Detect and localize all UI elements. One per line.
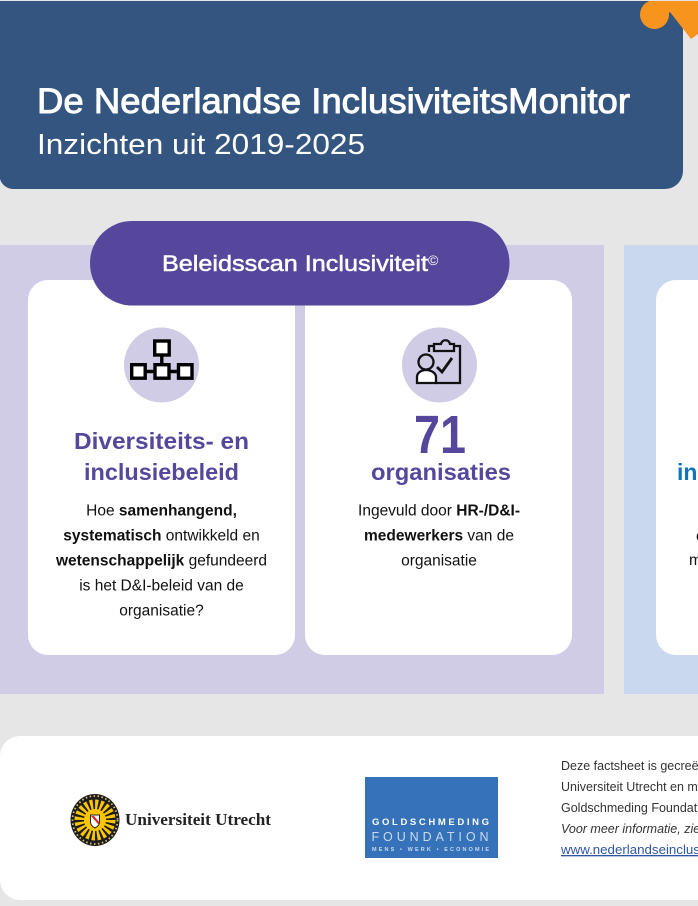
logo: Universiteit Utrecht [70, 794, 271, 846]
logo: Goldschmeding Foundation [365, 777, 498, 858]
heading fragment: blue card: in [677, 459, 697, 485]
logo: Goldschmeding Foundation: MENS • WERK • ECONOMIE [372, 847, 489, 853]
card: 71 organisations [305, 280, 572, 655]
icon: person with clipboard [402, 328, 477, 402]
card: blue section [656, 280, 698, 655]
text: footer credits [560, 759, 698, 857]
logo: Goldschmeding Foundation: GOLDSCHMEDING [372, 817, 489, 828]
logo: Universiteit Utrecht: Universiteit Utrecht [125, 810, 271, 829]
icon: network diagram [124, 328, 199, 402]
panel: purple section background [0, 245, 604, 694]
subtitle: Inzichten uit 2019-2025 [37, 129, 365, 161]
heading: diversity policy: inclusiebeleid [84, 459, 239, 485]
title: De Nederlandse InclusiviteitsMonitor [37, 82, 630, 121]
copyright mark: © [428, 252, 439, 268]
text: organisations description [358, 502, 520, 570]
panel: footer [0, 736, 698, 900]
logo: Goldschmeding Foundation: FOUNDATION [372, 830, 488, 844]
text: organisations description: organisatie [401, 552, 477, 570]
statistic: 71: 71 [414, 405, 466, 465]
heading: diversity policy: Diversiteits- en [74, 428, 249, 454]
text: organisations description: Ingevuld door HR-/D&I- [358, 502, 520, 520]
text: policy description: wetenschappelijk gefundeerd [55, 552, 267, 570]
header banner [0, 0, 698, 189]
text: policy description: systematisch ontwikkeld en [63, 528, 260, 544]
panel: blue section background [624, 245, 698, 694]
card: diversity and inclusion policy [28, 280, 295, 655]
section pill heading [90, 221, 510, 306]
text: organisations description: medewerkers van de [364, 528, 514, 544]
heading: diversity policy [74, 428, 249, 485]
text: footer credits: Voor meer informatie, zie [561, 822, 698, 836]
section pill heading: Beleidsscan Inclusiviteit [162, 251, 429, 276]
heading: organisaties: organisaties [371, 459, 511, 485]
text: policy description: is het D&I-beleid van de [79, 578, 244, 594]
text: policy description: Hoe samenhangend, [86, 502, 237, 520]
icon: orange corner decoration [640, 0, 698, 39]
text: policy description [55, 502, 267, 620]
text: policy description: organisatie? [119, 602, 204, 620]
text fragment: blue card [689, 528, 698, 569]
